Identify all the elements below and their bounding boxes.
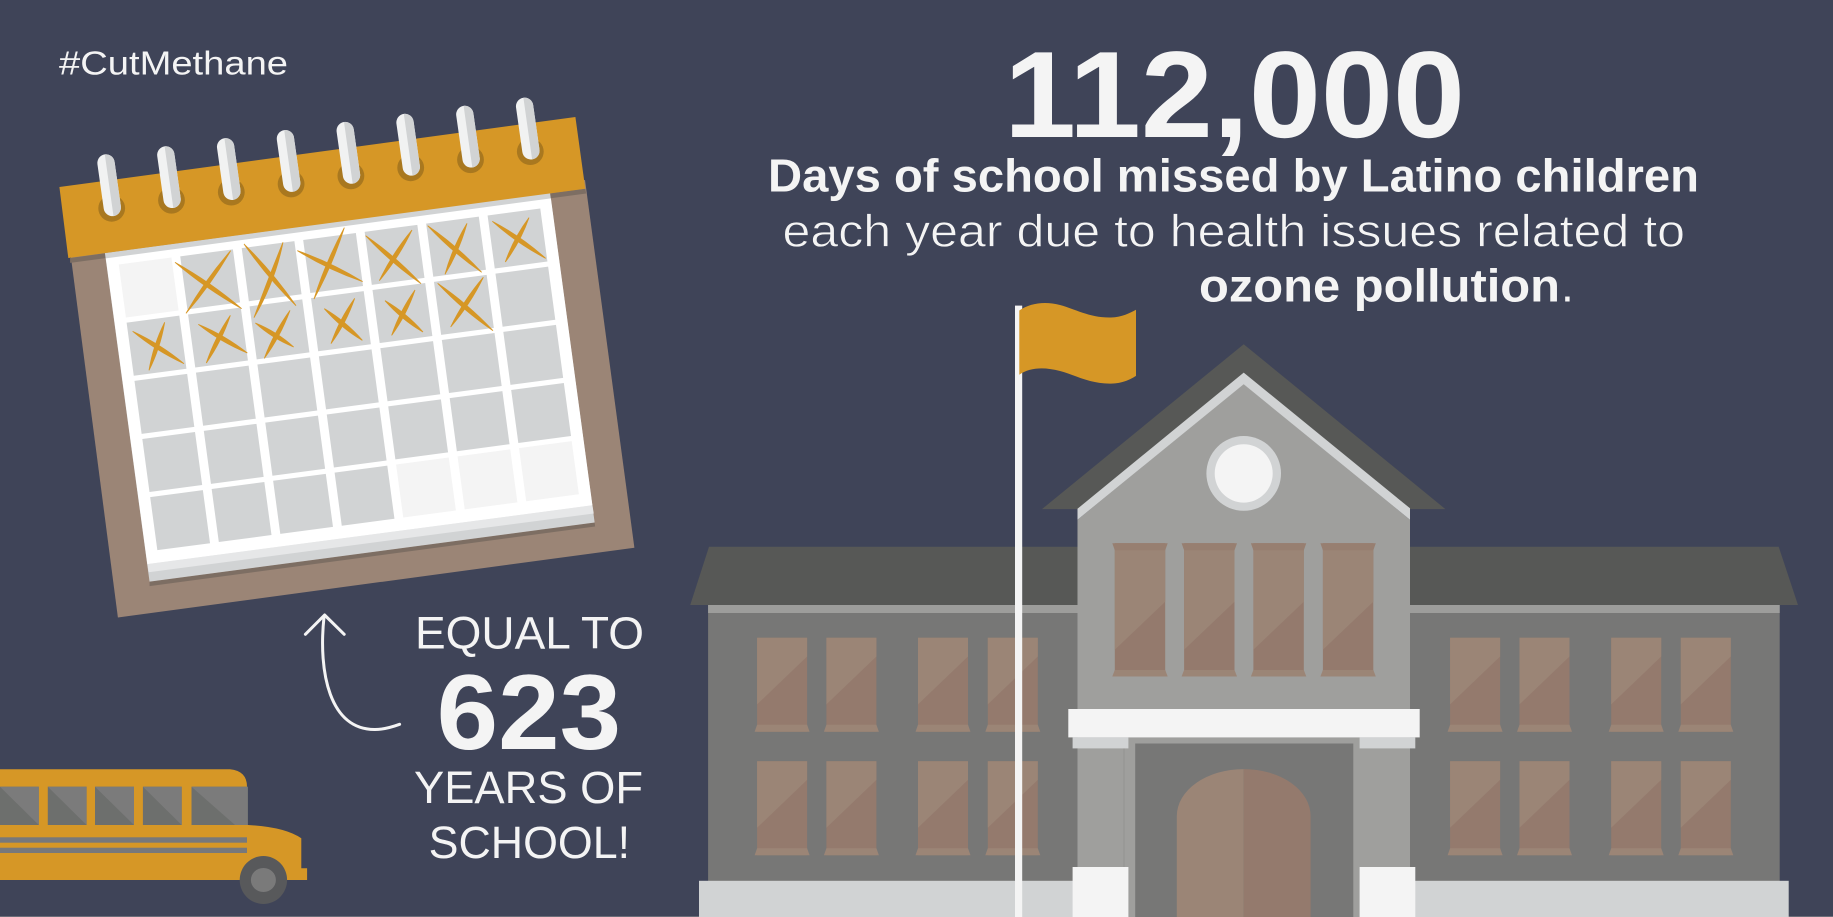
illustration: calendar bbox=[59, 98, 634, 618]
callout: equal to 623 years of school: SCHOOL! bbox=[429, 817, 630, 868]
callout: equal to 623 years of school: EQUAL TO bbox=[415, 608, 644, 659]
calendar binder rings bbox=[98, 98, 544, 222]
central block bbox=[1078, 384, 1410, 917]
column bases bbox=[1073, 867, 1415, 917]
wing wall bbox=[708, 605, 1780, 881]
callout: equal to 623 years of school bbox=[414, 608, 644, 868]
calendar orange header bbox=[59, 117, 585, 258]
orange X marks on missed days bbox=[133, 218, 546, 370]
wing windows bbox=[755, 638, 1733, 855]
headline description: each year due to health issues related to bbox=[782, 206, 1685, 257]
entrance recess bbox=[1135, 744, 1353, 917]
bus windows bbox=[0, 787, 248, 825]
column edge line bbox=[1124, 748, 1125, 867]
flagpole bbox=[1015, 306, 1022, 917]
callout: equal to 623 years of school: 623 bbox=[437, 652, 621, 772]
calendar pages bbox=[70, 189, 595, 586]
callout: equal to 623 years of school: YEARS OF bbox=[414, 762, 643, 813]
bus wheel bbox=[240, 856, 287, 904]
door bbox=[1177, 769, 1311, 917]
illustration: school building bbox=[690, 344, 1798, 917]
headline description: ozone pollution bbox=[1199, 260, 1560, 312]
illustration: school bus bbox=[0, 769, 307, 904]
central windows bbox=[1112, 543, 1376, 676]
hashtag: #CutMethane bbox=[59, 46, 288, 83]
calendar day cells bbox=[119, 209, 579, 550]
gable roof bbox=[1042, 344, 1445, 509]
calendar back board bbox=[70, 180, 634, 618]
portico beam bbox=[1068, 709, 1420, 737]
column capitals bbox=[1073, 737, 1415, 748]
round gable window bbox=[1206, 436, 1281, 511]
wing roof bbox=[690, 547, 1798, 605]
headline description: Days of school missed by Latino children bbox=[768, 150, 1699, 202]
headline description bbox=[768, 150, 1699, 312]
headline number: 112,000 bbox=[1004, 27, 1465, 164]
arrow pointing to calendar bbox=[305, 615, 400, 730]
sidewalk bbox=[699, 881, 1789, 917]
bus stripes bbox=[0, 837, 247, 853]
flag bbox=[1019, 303, 1136, 384]
bus body bbox=[0, 769, 307, 880]
headline description: . bbox=[1561, 260, 1574, 312]
gable trim bbox=[1078, 373, 1410, 520]
